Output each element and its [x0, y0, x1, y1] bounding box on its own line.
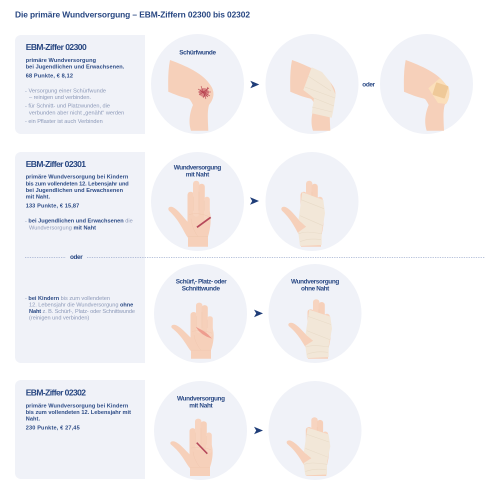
heading: 02300: EBM-Ziffer 02300	[26, 42, 87, 52]
label: Wundversorgung mit Naht, children: Wundversorgung	[177, 395, 225, 402]
list 02300: - ein Pflaster ist auch Verbinden	[25, 119, 103, 125]
description 02302: bis zum vollendeten 12. Lebensjahr mit	[26, 410, 131, 416]
title: Die primäre Wundversorgung – EBM-Ziffern 02300 bis 02302	[15, 9, 250, 19]
description 02301: primäre Wundversorgung bei Kindern	[26, 175, 129, 181]
arrow 3	[254, 310, 263, 317]
label: Wundversorgung ohne Naht: ohne Naht	[301, 286, 330, 293]
description 02301: bei Jugendlichen und Erwachsenen	[26, 188, 124, 194]
description 02302	[26, 403, 131, 432]
list 02301: - bei Jugendlichen und Erwachsenen die	[25, 219, 133, 225]
list 02301: Wundversorgung mit Naht	[29, 225, 96, 231]
label: oder: oder	[362, 82, 376, 89]
illustration: hand with sutured wound	[151, 152, 244, 251]
illustration: bandaged hand	[266, 152, 358, 251]
list 02300: - für Schnitt- und Platzwunden, die	[25, 103, 110, 109]
description 02301: bis zum vollendeten 12. Lebensjahr und	[26, 181, 129, 187]
description 02301: mit Naht.	[26, 195, 50, 201]
list 02300: – reinigen und verbinden.	[29, 95, 91, 101]
label: Wundversorgung mit Naht	[174, 165, 221, 179]
description 02301	[26, 175, 129, 209]
label: Wundversorgung mit Naht, children: mit Naht	[189, 402, 214, 409]
heading: 02302: EBM-Ziffer 02302	[26, 388, 86, 398]
label: Wundversorgung mit Naht: Wundversorgung	[174, 165, 221, 172]
list 02301	[25, 219, 133, 231]
list 02300: verbunden aber nicht „genäht“ werden	[29, 110, 124, 116]
list: children without suture: Naht z. B. Schürf-, Platz- oder Schnittwunde	[29, 309, 135, 315]
illustration: hand with abrasion or cut	[154, 264, 247, 363]
description 02300	[26, 58, 125, 80]
description 02301: 133 Punkte, € 15,87	[26, 203, 79, 209]
label: Schürfwunde: Schürfwunde	[179, 49, 216, 56]
label: Wundversorgung mit Naht, children	[177, 395, 225, 409]
description 02300: 68 Punkte, € 8,12	[26, 74, 73, 80]
panel: EBM 02301	[15, 152, 145, 363]
description 02302: 230 Punkte, € 27,45	[26, 426, 80, 432]
illustration: abrasion on knee	[151, 34, 244, 134]
panel: EBM 02300	[15, 35, 145, 134]
arrow 2	[250, 197, 259, 205]
arrow 4	[254, 427, 263, 434]
illustration: plaster on knee	[380, 34, 473, 134]
label: Wundversorgung ohne Naht	[291, 278, 339, 293]
divider label: oder: oder	[70, 254, 83, 261]
label: Wundversorgung mit Naht: mit Naht	[186, 172, 210, 179]
list: children without suture	[25, 296, 135, 322]
label: Schürf-, Platz- oder Schnittwunde: Schnittwunde	[182, 286, 220, 293]
illustration: bandaged hand without suture	[268, 264, 362, 363]
label: Schürf-, Platz- oder Schnittwunde: Schürf,- Platz- oder	[176, 278, 227, 285]
list 02300: - Versorgung einer Schürfwunde	[25, 88, 106, 94]
list 02300	[25, 88, 124, 125]
list: children without suture: (reinigen und verbinden)	[29, 316, 89, 322]
illustration: hand with sutured wound, children	[154, 381, 247, 480]
description 02300: primäre Wundversorgung	[26, 58, 97, 64]
illustration: bandaged knee	[266, 34, 358, 134]
panel: EBM 02302	[15, 380, 145, 479]
label: Schürf-, Platz- oder Schnittwunde	[176, 278, 227, 293]
heading: 02301: EBM-Ziffer 02301	[26, 159, 86, 169]
label: Wundversorgung ohne Naht: Wundversorgung	[291, 278, 339, 285]
description 02302: primäre Wundversorgung bei Kindern	[26, 403, 129, 409]
description 02302: Naht.	[26, 417, 40, 423]
list: children without suture: - bei Kindern bis zum vollendeten	[25, 296, 110, 302]
list: children without suture: 12. Lebensjahr die Wundversorgung ohne	[29, 302, 133, 308]
illustration: bandaged hand, children	[268, 381, 362, 480]
description 02300: bei Jugendlichen und Erwachsenen.	[26, 65, 125, 71]
arrow 1	[250, 81, 259, 88]
